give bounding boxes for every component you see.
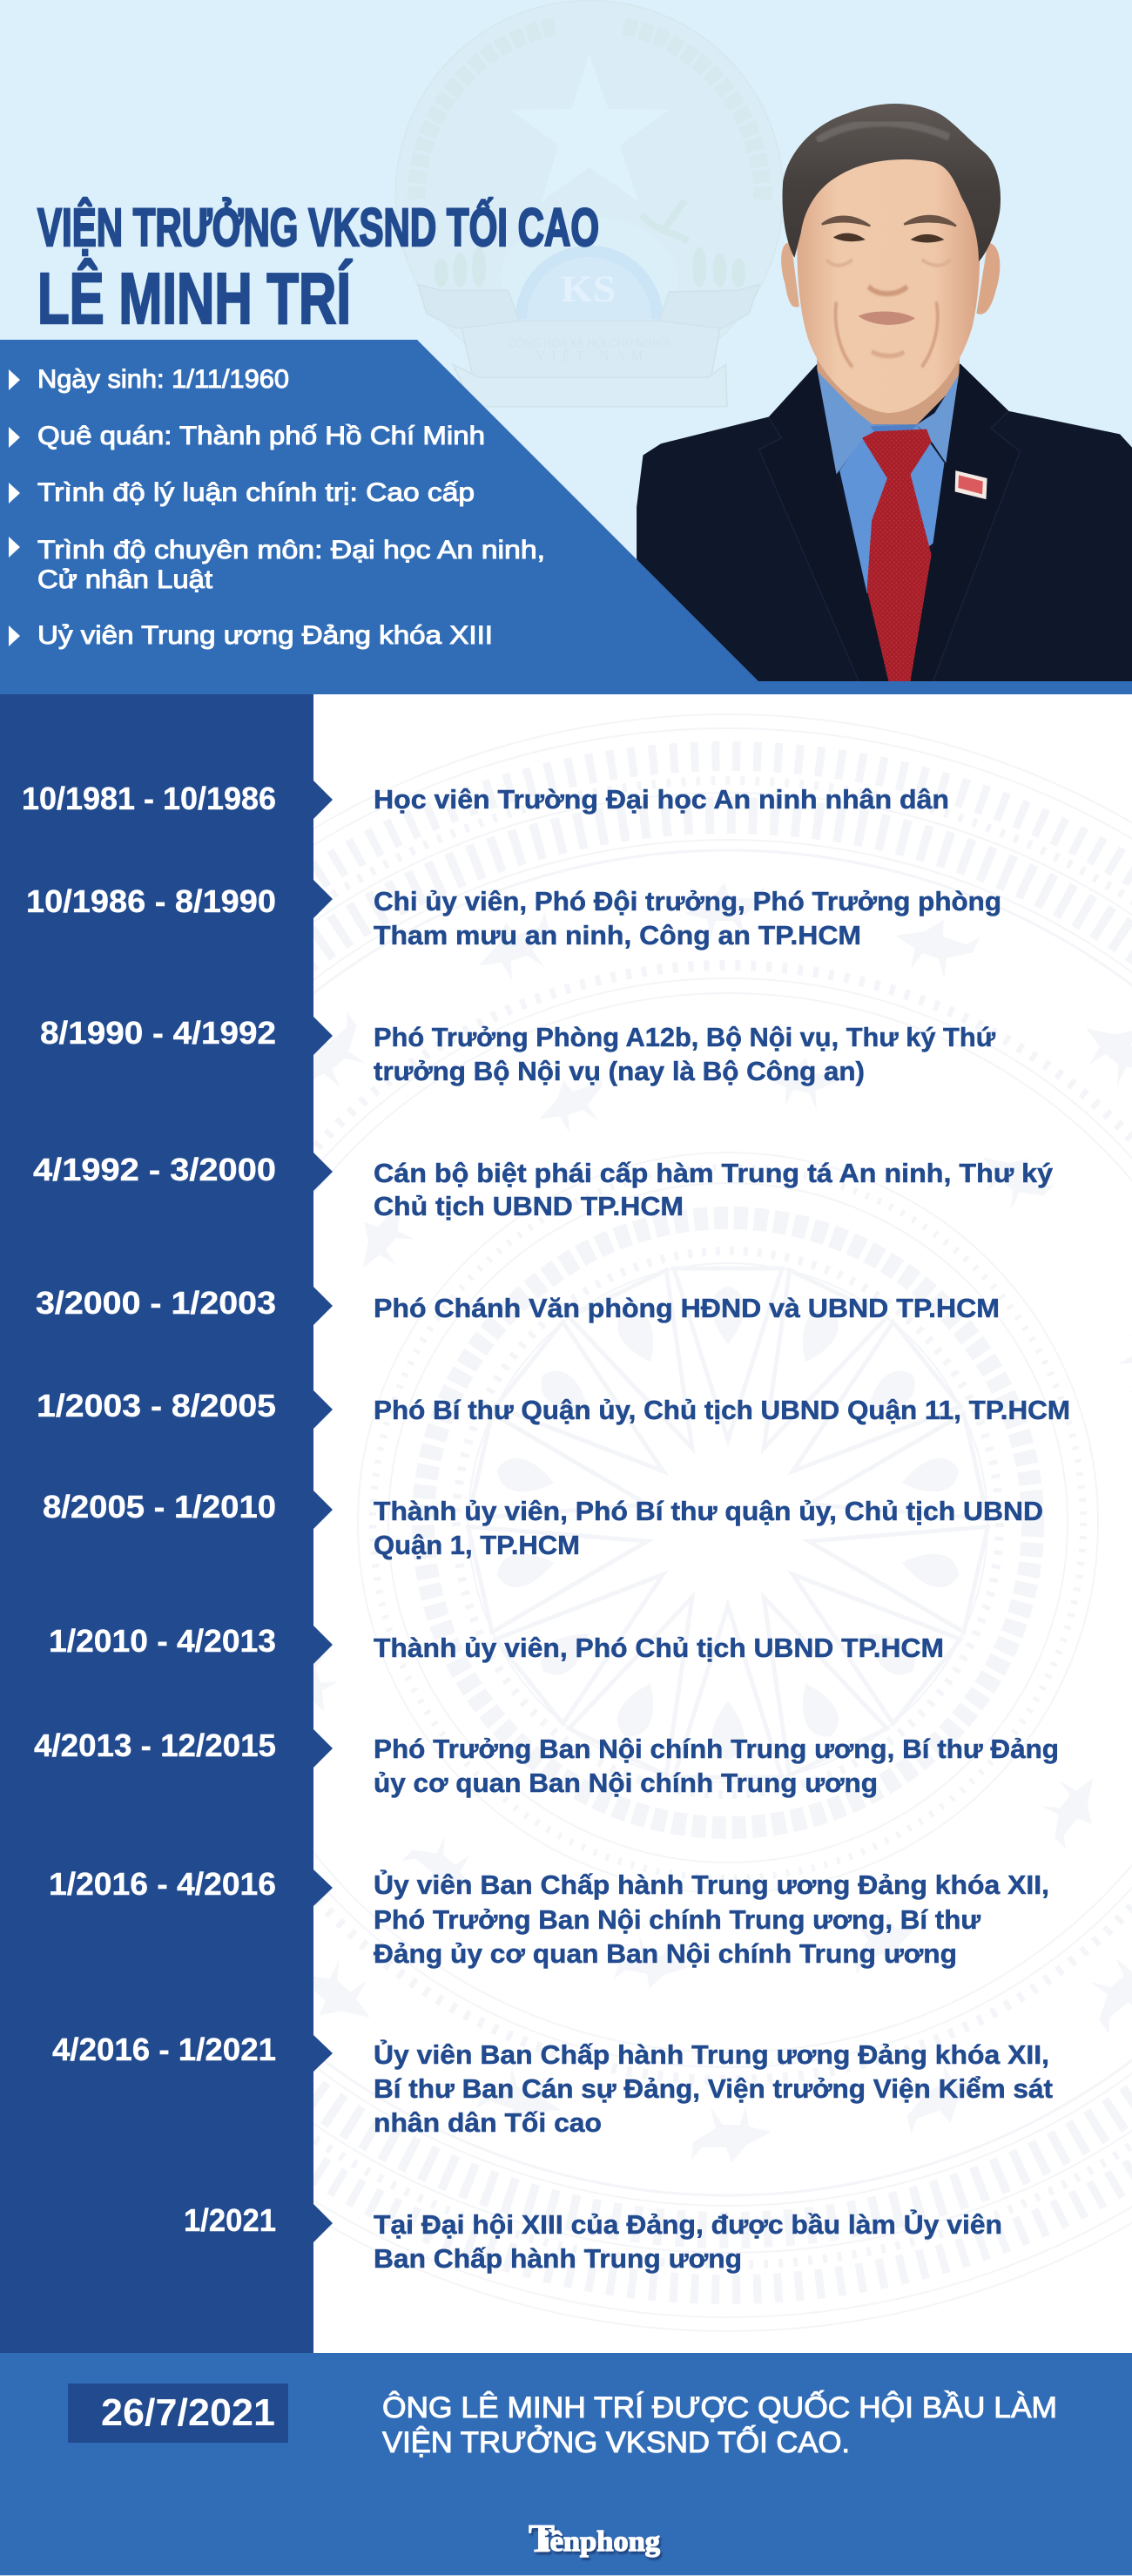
title xyxy=(37,198,599,339)
entry 1/2010 - 4/2013: 1/2010 - 4/2013 xyxy=(49,1623,276,1659)
footer statement xyxy=(382,2390,1057,2459)
detail: professional qualification: Trình độ chuyên môn: Đại học An ninh, xyxy=(37,536,545,565)
entry 10/1981 - 10/1986 xyxy=(22,781,949,819)
entry 8/2005 - 1/2010: Quận 1, TP.HCM xyxy=(374,1530,580,1560)
shirt and collar xyxy=(839,424,944,593)
entry 4/2016 - 1/2021: Bí thư Ban Cán sự Đảng, Viện trưởng Viện Kiểm sát xyxy=(374,2073,1053,2104)
detail: political theory: Trình độ lý luận chính trị: Cao cấp xyxy=(37,478,475,507)
title: LÊ MINH TRÍ xyxy=(37,258,352,339)
entry 1/2021 xyxy=(184,2202,1002,2274)
timeline entries xyxy=(22,781,1070,2274)
entry 1/2010 - 4/2013 xyxy=(49,1623,944,1664)
entry 10/1986 - 8/1990 xyxy=(26,880,1001,950)
entry 1/2016 - 4/2016 xyxy=(49,1866,1049,1969)
entry 4/2013 - 12/2015: Phó Trưởng Ban Nội chính Trung ương, Bí thư Đảng xyxy=(374,1734,1059,1764)
footer date badge xyxy=(68,2383,288,2443)
facial shading xyxy=(826,260,951,367)
watermark emblem: KS xyxy=(561,268,616,310)
entry 1/2016 - 4/2016: Đảng ủy cơ quan Ban Nội chính Trung ương xyxy=(374,1938,957,1969)
entry 8/1990 - 4/1992: 8/1990 - 4/1992 xyxy=(40,1015,276,1051)
hair xyxy=(783,104,1001,261)
footer date badge: 26/7/2021 xyxy=(101,2391,275,2434)
eyebrows xyxy=(822,217,870,226)
detail: hometown: Quê quán: Thành phố Hồ Chí Minh xyxy=(37,422,485,450)
entry 1/2016 - 4/2016: Ủy viên Ban Chấp hành Trung ương Đảng khóa XII, xyxy=(374,1869,1049,1900)
entry 1/2003 - 8/2005: 1/2003 - 8/2005 xyxy=(37,1388,276,1423)
entry 4/2013 - 12/2015: 4/2013 - 12/2015 xyxy=(34,1727,276,1763)
entry 1/2016 - 4/2016: 1/2016 - 4/2016 xyxy=(49,1866,276,1902)
entry 4/2016 - 1/2021: 4/2016 - 1/2021 xyxy=(52,2032,276,2067)
detail: professional qualification: Cử nhân Luật xyxy=(37,565,213,594)
entry 8/1990 - 4/1992 xyxy=(40,1015,996,1086)
eyes xyxy=(833,233,866,241)
entry 1/2021: Tại Đại hội XIII của Đảng, được bầu làm Ủy viên xyxy=(374,2208,1002,2240)
entry 8/1990 - 4/1992: trưởng Bộ Nội vụ (nay là Bộ Công an) xyxy=(374,1056,865,1086)
lapel pin xyxy=(955,470,987,499)
drum central star triangles xyxy=(468,1268,987,1777)
logo: Tiền Phong xyxy=(529,2516,661,2560)
entry 8/1990 - 4/1992: Phó Trưởng Phòng A12b, Bộ Nội vụ, Thư ký Thứ xyxy=(374,1022,996,1052)
logo: Tiền Phong: T xyxy=(529,2516,555,2560)
jacket lapels xyxy=(759,369,888,681)
detail: birth date: Ngày sinh: 1/11/1960 xyxy=(37,365,289,394)
footer panel xyxy=(0,2353,1132,2576)
entry 8/2005 - 1/2010: 8/2005 - 1/2010 xyxy=(43,1489,276,1525)
ears xyxy=(781,242,799,308)
suit jacket xyxy=(637,364,1132,681)
detail: professional qualification xyxy=(9,536,545,594)
detail: central committee: Uỷ viên Trung ương Đảng khóa XIII xyxy=(37,621,493,650)
title: VIỆN TRƯỞNG VKSND TỐI CAO xyxy=(37,198,599,257)
drum outer bird ring xyxy=(313,883,1132,2162)
necktie xyxy=(862,429,932,681)
entry 4/2013 - 12/2015: ủy cơ quan Ban Nội chính Trung ương xyxy=(374,1768,878,1798)
white timeline background with bronze drum watermark xyxy=(313,713,1132,2332)
entry 3/2000 - 1/2003 xyxy=(36,1285,1000,1325)
face xyxy=(797,156,980,413)
footer statement: VIỆN TRƯỞNG VKSND TỐI CAO. xyxy=(382,2425,850,2459)
entry 1/2003 - 8/2005 xyxy=(37,1388,1070,1429)
entry 4/1992 - 3/2000: Cán bộ biệt phái cấp hàm Trung tá An ninh, Thư ký xyxy=(374,1158,1054,1188)
entry 1/2010 - 4/2013: Thành ủy viên, Phó Chủ tịch UBND TP.HCM xyxy=(374,1633,944,1663)
entry 8/2005 - 1/2010 xyxy=(43,1489,1043,1560)
entry 10/1981 - 10/1986: Học viên Trường Đại học An ninh nhân dân xyxy=(374,784,949,815)
panel: personal details xyxy=(0,340,1132,694)
header background xyxy=(0,0,1132,694)
portrait photo xyxy=(637,104,1132,681)
entry 10/1986 - 8/1990: 10/1986 - 8/1990 xyxy=(26,883,276,919)
entry 10/1981 - 10/1986: 10/1981 - 10/1986 xyxy=(22,781,276,816)
entry 1/2021: 1/2021 xyxy=(184,2202,276,2238)
entry 1/2016 - 4/2016: Phó Trưởng Ban Nội chính Trung ương, Bí thư xyxy=(374,1904,981,1935)
entry 4/2016 - 1/2021: Ủy viên Ban Chấp hành Trung ương Đảng khóa XII, xyxy=(374,2038,1049,2070)
entry 3/2000 - 1/2003: Phó Chánh Văn phòng HĐND và UBND TP.HCM xyxy=(374,1293,1000,1323)
watermark emblem xyxy=(395,1,784,407)
watermark emblem: VIỆT NAM xyxy=(536,348,643,363)
entry 4/1992 - 3/2000: Chủ tịch UBND TP.HCM xyxy=(374,1191,684,1221)
entry 10/1986 - 8/1990: Chi ủy viên, Phó Đội trưởng, Phó Trưởng phòng xyxy=(374,886,1001,916)
entry 4/1992 - 3/2000: 4/1992 - 3/2000 xyxy=(33,1152,276,1187)
neck xyxy=(817,336,960,424)
entry 4/2013 - 12/2015 xyxy=(34,1727,1059,1798)
logo: Tiền Phong: iềnphong xyxy=(542,2526,661,2558)
entry 4/2016 - 1/2021 xyxy=(52,2032,1053,2138)
watermark emblem: CỘNG HÒA XÃ HỘI CHỦ NGHĨA xyxy=(508,335,670,350)
entry 4/1992 - 3/2000 xyxy=(33,1152,1054,1221)
entry 10/1986 - 8/1990: Tham mưu an ninh, Công an TP.HCM xyxy=(374,920,861,950)
entry 3/2000 - 1/2003: 3/2000 - 1/2003 xyxy=(36,1285,276,1321)
footer statement: ÔNG LÊ MINH TRÍ ĐƯỢC QUỐC HỘI BẦU LÀM xyxy=(382,2390,1057,2424)
entry 1/2003 - 8/2005: Phó Bí thư Quận ủy, Chủ tịch UBND Quận 11, TP.HCM xyxy=(374,1395,1070,1425)
entry 8/2005 - 1/2010: Thành ủy viên, Phó Bí thư quận ủy, Chủ tịch UBND xyxy=(374,1496,1043,1526)
entry 4/2016 - 1/2021: nhân dân Tối cao xyxy=(374,2107,602,2138)
entry 1/2021: Ban Chấp hành Trung ương xyxy=(374,2243,742,2274)
timeline date column xyxy=(0,694,313,2353)
mouth xyxy=(859,311,915,325)
